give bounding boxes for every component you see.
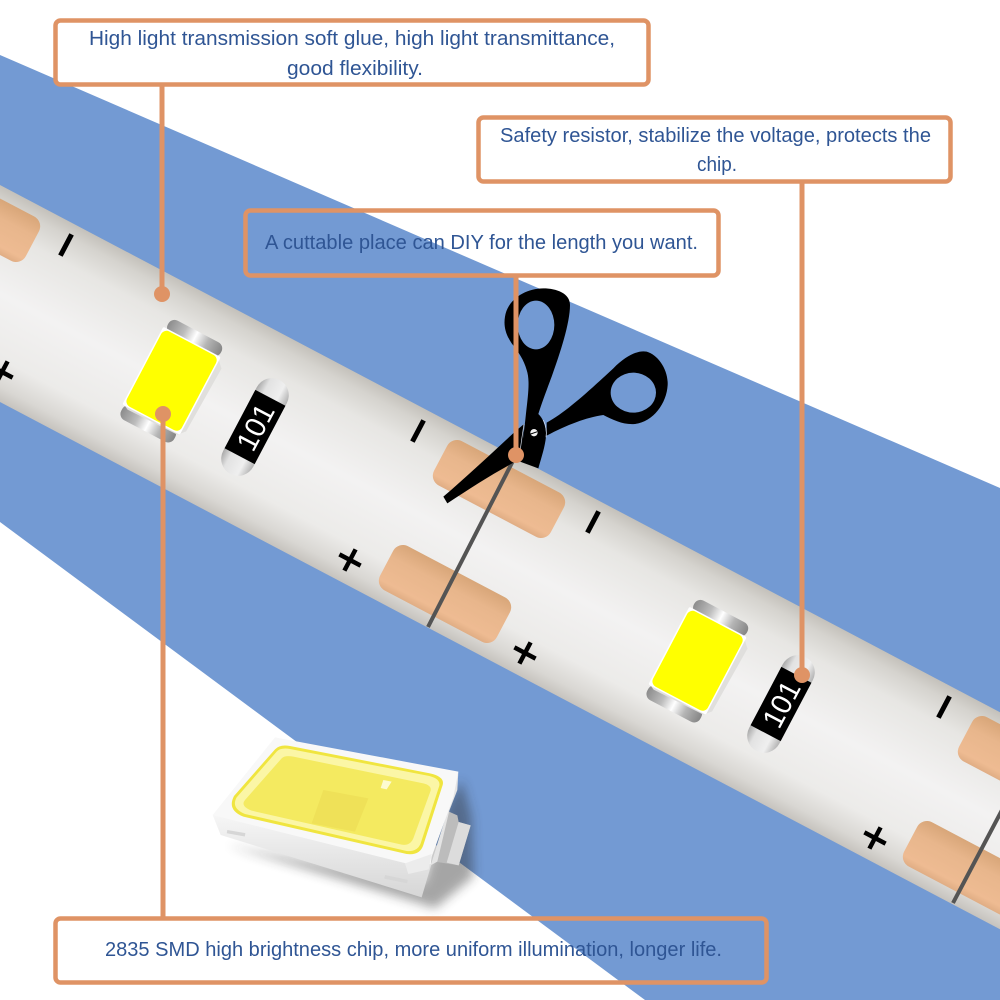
icon: scissors bbox=[443, 288, 668, 503]
callout: cuttable place: A cuttable place can DIY for the length you want. bbox=[265, 232, 698, 254]
callout: high light transmission soft glue bbox=[56, 20, 648, 84]
callout: safety resistor: chip. bbox=[697, 154, 737, 176]
LED chip on strip, right bbox=[642, 596, 758, 729]
resistor 101, left bbox=[215, 372, 295, 482]
copper solder pads bbox=[0, 160, 1000, 923]
resistor 101, left: 101 bbox=[231, 399, 282, 457]
leader: cuttable callout to cut line bbox=[508, 275, 524, 463]
callout: 2835 SMD chip: 2835 SMD high brightness chip, more uniform illumination, longer life. bbox=[105, 939, 722, 961]
leader: resistor callout to resistor bbox=[794, 182, 810, 683]
polarity marks: minus bbox=[60, 234, 950, 718]
polarity marks: plus bbox=[0, 356, 891, 854]
callout: high light transmission soft glue: High light transmission soft glue, high light transmittance, bbox=[89, 28, 615, 50]
resistor 101, right: 101 bbox=[757, 676, 808, 734]
LED chip on strip, left bbox=[116, 316, 232, 449]
callout: cuttable place bbox=[246, 210, 718, 276]
leader: chip callout to LED bbox=[155, 406, 171, 918]
cut lines bbox=[428, 455, 1000, 903]
callout: safety resistor bbox=[478, 118, 950, 182]
resistor 101, right bbox=[741, 649, 821, 759]
leader: soft glue callout to strip bbox=[154, 85, 170, 302]
callout: high light transmission soft glue: good flexibility. bbox=[287, 58, 423, 80]
callout: 2835 SMD chip bbox=[56, 918, 766, 982]
callout: safety resistor: Safety resistor, stabilize the voltage, protects the bbox=[500, 125, 931, 147]
2835 SMD chip illustration bbox=[213, 737, 473, 908]
